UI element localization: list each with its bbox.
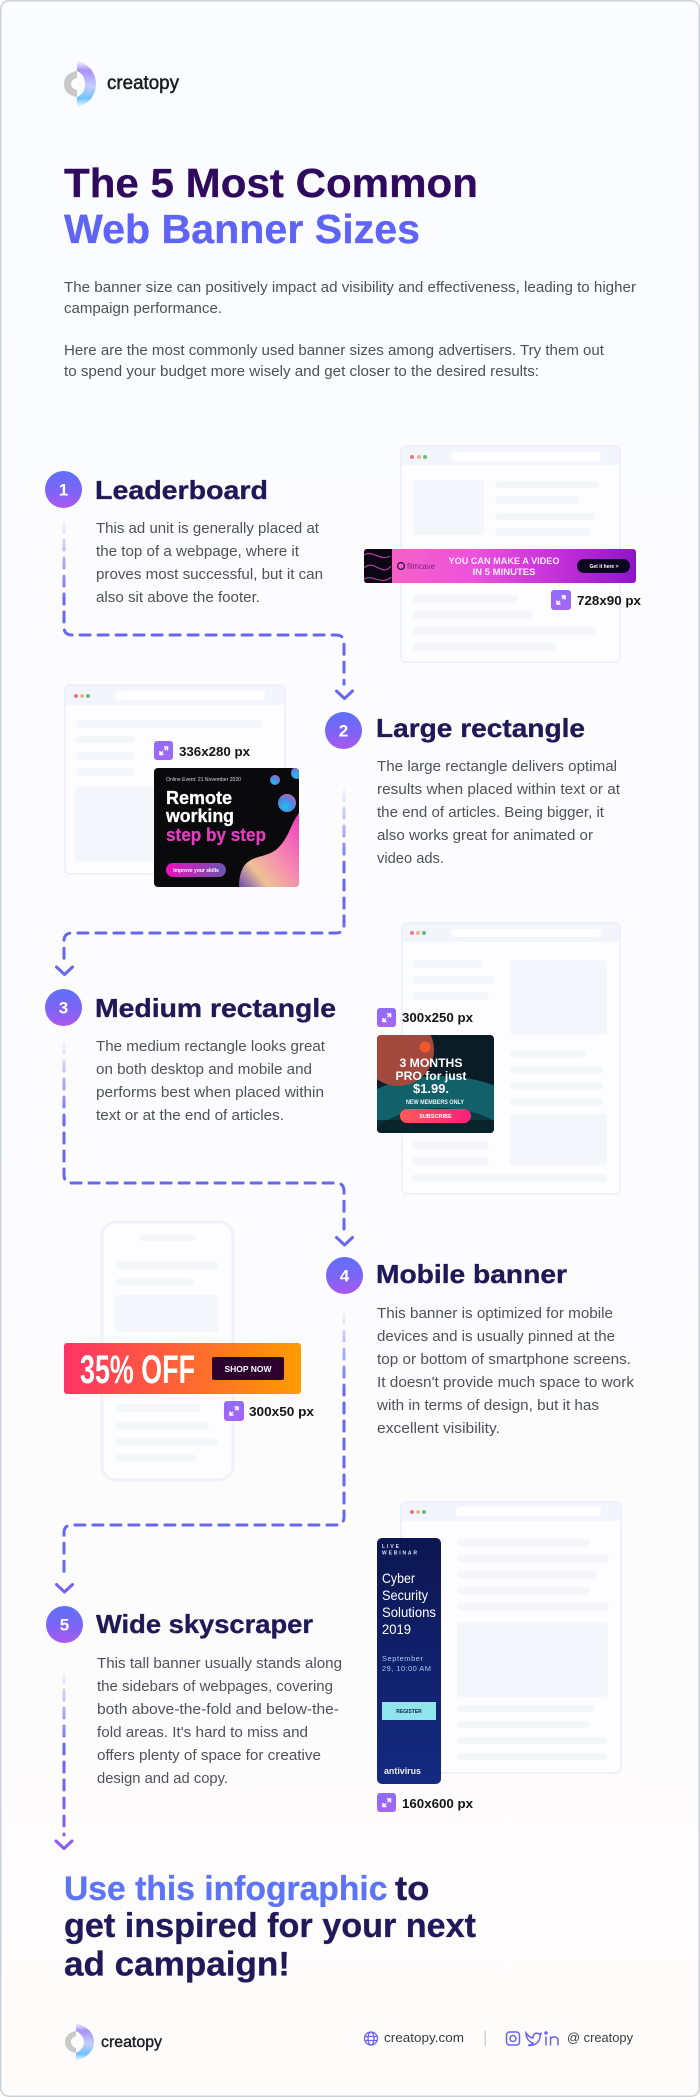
step 5: wide skyscraper: offers plenty of space for creative [97, 1747, 321, 1764]
size badge 300x50: 300x50 px [249, 1404, 315, 1419]
arrow: step 3 to step 4 [64, 1043, 352, 1245]
phone mockup [102, 1222, 233, 1480]
size badge 728x90 [551, 590, 642, 610]
intro text: Here are the most commonly used banner sizes among advertisers. Try them out [64, 342, 605, 359]
step 1: leaderboard: Leaderboard [95, 475, 268, 505]
step 2: large rectangle: 2 [339, 722, 348, 740]
step 5: wide skyscraper: Wide skyscraper [96, 1609, 313, 1639]
wide skyscraper banner 160x600: September [382, 1654, 424, 1663]
step 4: mobile banner: devices and is usually pinned at the [377, 1328, 615, 1345]
arrow: step 4 to step 5 [56, 1313, 344, 1592]
arrow: step 1 to step 2 [64, 522, 352, 698]
step 3: medium rectangle: Medium rectangle [95, 993, 336, 1023]
leaderboard banner 728x90 [364, 549, 636, 583]
closing call to action: get inspired for your next [64, 1907, 476, 1945]
large rectangle banner 336x280: Online Event: 21 November 2020 [166, 777, 241, 783]
size badge 336x280: 336x280 px [179, 744, 251, 759]
step 3: medium rectangle: 3 [59, 998, 68, 1018]
step 2: large rectangle: Large rectangle [376, 713, 585, 743]
step 2: large rectangle: video ads. [377, 850, 444, 867]
step 3: medium rectangle: performs best when placed within [96, 1084, 324, 1101]
large rectangle banner 336x280: Improve your skills [173, 868, 219, 874]
step 3: medium rectangle: The medium rectangle looks great [96, 1038, 326, 1055]
wide skyscraper banner 160x600: antivirus [384, 1766, 421, 1776]
wide skyscraper banner 160x600: 29, 10:00 AM [382, 1664, 431, 1673]
logo: creatopy header: creatopy [107, 73, 179, 94]
step 4: mobile banner: This banner is optimized for mobile [377, 1305, 613, 1322]
size badge 300x250: 300x250 px [402, 1010, 474, 1025]
step 2: large rectangle: the end of articles. Being bigger, it [377, 804, 605, 821]
footer social icons: @ creatopy [567, 2030, 633, 2045]
medium rectangle banner 300x250: PRO for just [396, 1069, 466, 1083]
title: Web Banner Sizes [64, 206, 420, 252]
title [64, 160, 478, 252]
step 2: large rectangle: results when placed within text or at [377, 781, 621, 798]
wide skyscraper banner 160x600: Solutions [382, 1604, 436, 1620]
intro text: campaign performance. [64, 300, 222, 317]
logo: creatopy header [64, 61, 179, 107]
footer social icons [506, 2030, 633, 2046]
step 5: wide skyscraper: fold areas. It's hard to miss and [97, 1724, 308, 1741]
size badge 160x600 [377, 1793, 474, 1812]
footer website link: creatopy.com [384, 2030, 464, 2045]
browser mockup 2 [65, 685, 285, 874]
arrow: step 2 to step 3 [56, 790, 344, 974]
leaderboard banner 728x90: IN 5 MINUTES [472, 567, 536, 578]
size badge 728x90: 728x90 px [577, 593, 642, 608]
step 5: wide skyscraper: 5 [60, 1616, 69, 1634]
step 3: medium rectangle: text or at the end of articles. [96, 1107, 284, 1124]
wide skyscraper banner 160x600: WEBINAR [382, 1550, 417, 1556]
step 1: leaderboard: also sit above the footer. [96, 589, 260, 606]
intro text [64, 279, 636, 380]
step 3: medium rectangle: on both desktop and mobile and [96, 1061, 312, 1078]
wide skyscraper banner 160x600: Security [382, 1587, 428, 1603]
step 5: wide skyscraper: This tall banner usually stands along [97, 1655, 342, 1672]
browser mockup 1 [401, 446, 620, 662]
closing call to action: to [395, 1870, 430, 1908]
medium rectangle banner 300x250: NEW MEMBERS ONLY [406, 1100, 464, 1106]
intro text: The banner size can positively impact ad visibility and effectiveness, leading to higher [64, 279, 636, 296]
step 5: wide skyscraper [46, 1606, 342, 1787]
step 1: leaderboard: the top of a webpage, where it [96, 543, 300, 560]
step 4: mobile banner: 4 [340, 1266, 350, 1286]
medium rectangle banner 300x250: $1.99. [413, 1081, 449, 1096]
step 2: large rectangle: also works great for animated or [377, 827, 593, 844]
medium rectangle banner 300x250: SUBSCRIBE [419, 1114, 452, 1120]
wide skyscraper banner 160x600: REGISTER [396, 1709, 422, 1715]
medium rectangle banner 300x250: 3 MONTHS [400, 1056, 462, 1070]
wide skyscraper banner 160x600: Cyber [382, 1570, 415, 1586]
step 4: mobile banner: top or bottom of smartphone screens. [377, 1351, 631, 1368]
step 1: leaderboard [45, 471, 323, 606]
browser mockup 5 [401, 1502, 621, 1773]
mobile banner 300x50 [64, 1343, 301, 1394]
step 5: wide skyscraper: design and ad copy. [97, 1770, 228, 1787]
size badge 300x250 [377, 1008, 474, 1027]
footer divider [484, 2031, 486, 2046]
leaderboard banner 728x90: filmcave [407, 561, 435, 571]
large rectangle banner 336x280: step by step [166, 824, 266, 845]
closing call to action: ad campaign! [64, 1946, 290, 1984]
step 4: mobile banner: It doesn't provide much space to work [377, 1374, 635, 1391]
logo: creatopy footer: creatopy [101, 2034, 162, 2051]
step 3: medium rectangle [45, 989, 336, 1124]
large rectangle banner 336x280: working [165, 805, 234, 826]
size badge 336x280 [154, 741, 251, 760]
title: The 5 Most Common [64, 160, 478, 206]
step 5: wide skyscraper: the sidebars of webpages, covering [97, 1678, 333, 1695]
closing call to action [64, 1870, 476, 1984]
logo: creatopy footer [65, 2023, 162, 2061]
step 1: leaderboard: This ad unit is generally placed at [96, 520, 320, 537]
step 2: large rectangle: The large rectangle delivers optimal [377, 758, 617, 775]
closing call to action: Use this infographic [64, 1870, 388, 1908]
step 1: leaderboard: proves most successful, but it can [96, 566, 323, 583]
step 4: mobile banner: with in terms of design, but it has [376, 1397, 599, 1414]
leaderboard banner 728x90: YOU CAN MAKE A VIDEO [448, 556, 560, 567]
browser mockup 3 [402, 923, 620, 1194]
intro text: to spend your budget more wisely and get closer to the desired results: [64, 363, 539, 380]
wide skyscraper banner 160x600: 2019 [382, 1621, 411, 1637]
step 1: leaderboard: 1 [59, 480, 68, 500]
mobile banner 300x50: 35% OFF [80, 1348, 195, 1392]
wide skyscraper banner 160x600 [377, 1538, 441, 1784]
mobile banner 300x50: SHOP NOW [224, 1364, 272, 1374]
step 4: mobile banner [326, 1257, 635, 1437]
step 4: mobile banner: Mobile banner [376, 1259, 567, 1289]
step 2: large rectangle [325, 712, 621, 867]
medium rectangle banner 300x250 [377, 1035, 494, 1133]
step 4: mobile banner: excellent visibility. [377, 1420, 500, 1437]
size badge 300x50 [224, 1401, 315, 1421]
large rectangle banner 336x280: Remote [166, 787, 232, 808]
arrow: step 5 to closing [56, 1672, 72, 1848]
large rectangle banner 336x280 [154, 767, 303, 887]
leaderboard banner 728x90: Get it here > [589, 564, 619, 570]
size badge 160x600: 160x600 px [402, 1796, 474, 1811]
step 5: wide skyscraper: both above-the-fold and below-the- [97, 1701, 339, 1718]
wide skyscraper banner 160x600: LIVE [382, 1544, 400, 1550]
